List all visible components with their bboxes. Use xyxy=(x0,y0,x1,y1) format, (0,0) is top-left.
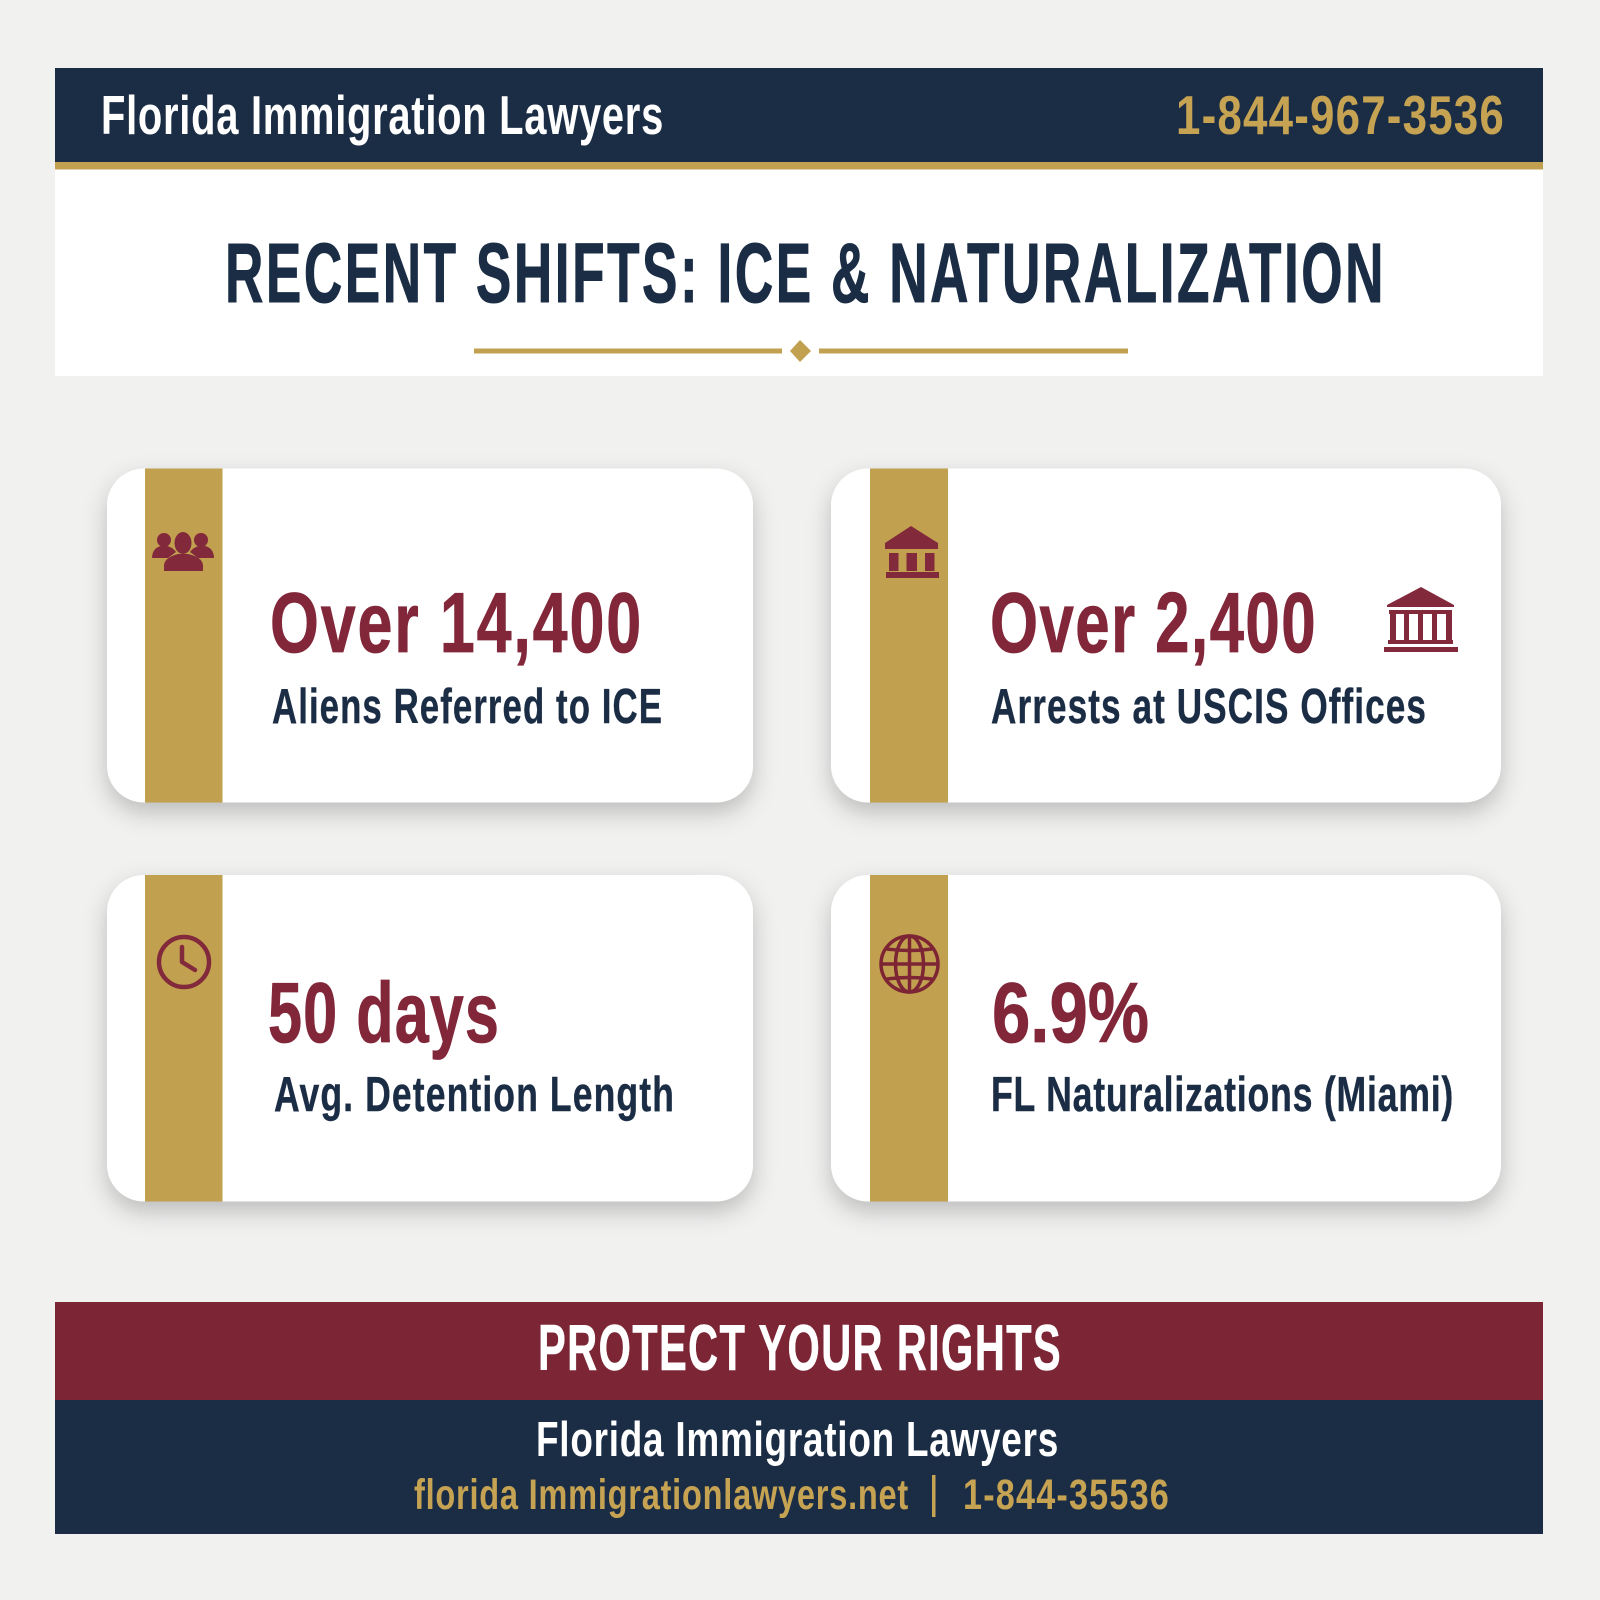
stat label: Arrests at USCIS Offices xyxy=(991,680,1427,734)
stat value: Over 14,400 xyxy=(270,576,643,671)
panel: average detention length xyxy=(107,875,753,1202)
stat value: Over 2,400 xyxy=(990,576,1317,671)
footer website: florida Immigrationlawyers.net xyxy=(414,1471,909,1519)
panel: arrests at USCIS offices xyxy=(831,468,1501,802)
stat label: Avg. Detention Length xyxy=(274,1068,675,1122)
panel: aliens referred to ICE xyxy=(107,468,753,802)
stat label: Aliens Referred to ICE xyxy=(272,680,663,734)
call to action heading: PROTECT YOUR RIGHTS xyxy=(538,1311,1062,1384)
panel: Florida naturalizations xyxy=(831,875,1501,1202)
call to action band xyxy=(55,1302,1543,1400)
stat value: 50 days xyxy=(268,966,500,1061)
icon: globe xyxy=(881,936,938,992)
icon: courthouse small xyxy=(885,526,939,578)
title divider xyxy=(474,340,1128,362)
stat value: 6.9% xyxy=(992,966,1149,1061)
footer band xyxy=(55,1400,1543,1534)
footer phone: 1-844-35536 xyxy=(963,1471,1170,1519)
firm name: Florida Immigration Lawyers xyxy=(101,84,664,146)
footer firm name: Florida Immigration Lawyers xyxy=(536,1413,1059,1467)
phone number: 1-844-967-3536 xyxy=(1176,84,1505,146)
icon: courthouse large xyxy=(1384,587,1458,652)
title panel xyxy=(55,170,1543,376)
icon: group of people xyxy=(152,532,214,571)
header bar xyxy=(55,68,1543,170)
icon: clock xyxy=(159,937,209,987)
